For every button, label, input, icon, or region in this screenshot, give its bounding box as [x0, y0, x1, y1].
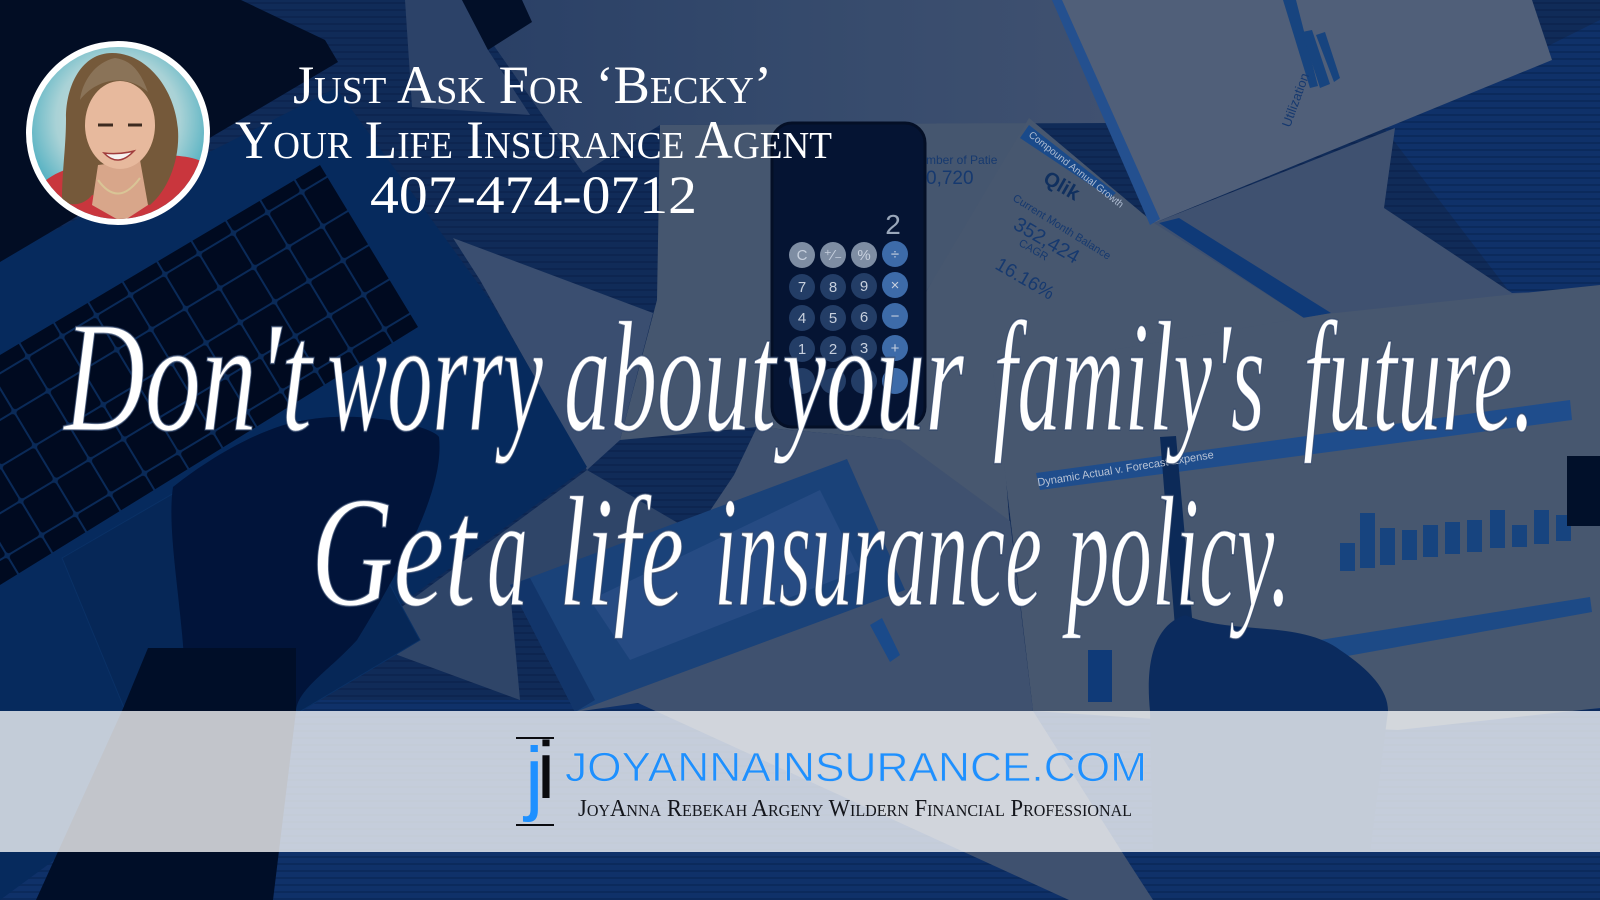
calculator buttons: 9 [860, 278, 868, 295]
footer logo and branding [516, 726, 1147, 826]
paper: below laptop edge [357, 470, 690, 700]
eyes [98, 124, 142, 126]
calculator buttons: % [857, 247, 871, 264]
line two: a [487, 465, 528, 640]
name and title: JoyAnna Rebekah Argeny Wildern Financial Professional [578, 796, 1132, 822]
desk below band [0, 700, 1600, 900]
footer band [0, 711, 1600, 852]
blue diagonal stripe [1159, 218, 1331, 318]
right hand [1149, 615, 1388, 852]
dashboard blue stripe [1036, 400, 1572, 490]
small report bars [870, 618, 900, 662]
stack side edge [1052, 0, 1160, 225]
hand on trackpad [171, 417, 440, 712]
laptop body [0, 88, 587, 900]
line: your life insurance agent: Your Life Insurance Agent [235, 110, 832, 170]
line one: your [773, 290, 964, 465]
label: growth rate: 16.16% [992, 254, 1058, 305]
line one: worry [327, 290, 543, 465]
calculator buttons: 7 [798, 279, 806, 296]
surface wedge at left [0, 127, 34, 217]
paper: top left sheet [405, 0, 530, 115]
line one: about [564, 290, 778, 465]
line two [311, 465, 1291, 640]
ji monogram logo [516, 726, 555, 826]
smile [104, 151, 134, 160]
pen [1160, 436, 1194, 640]
label: balance title: Current Month Balance [1010, 192, 1113, 262]
line two: Get [311, 465, 479, 640]
portrait figure [46, 53, 200, 219]
calculator buttons [789, 241, 908, 394]
paper: lower centre [575, 427, 1153, 900]
paper: insights sheet [1000, 128, 1600, 420]
black clip top centre [462, 0, 532, 50]
dashboard bar chart [1340, 510, 1571, 571]
calculator buttons: 4 [798, 310, 806, 327]
hair highlight [80, 58, 148, 100]
dashboard table stripe [1320, 597, 1592, 660]
paper: Qlik report [880, 118, 1330, 530]
paper: top centre sheet [490, 0, 1110, 173]
paper: under laptop [453, 238, 653, 470]
calculator buttons: 6 [860, 309, 868, 326]
money detail [590, 490, 860, 660]
stack bars [1283, 0, 1340, 88]
face [85, 81, 155, 169]
calculator buttons: 2 [829, 341, 837, 358]
label: CAGR: CAGR [1016, 237, 1050, 264]
calculator buttons: − [891, 308, 900, 325]
binder clip [1567, 456, 1600, 526]
label: patients number: 0,720 [926, 168, 974, 189]
ji monogram logo: j [522, 730, 543, 823]
label: dashboard title: Dynamic Actual v. Forecast Expense [1037, 449, 1215, 489]
label: stripe heading: Compound Annual Growth [1026, 130, 1125, 211]
line two: life [559, 465, 684, 640]
paper labels [926, 71, 1312, 489]
line one: family's [993, 290, 1265, 465]
line two: insurance [714, 465, 1042, 640]
calculator buttons: + [891, 340, 900, 357]
main script message [63, 290, 1535, 640]
calculator buttons: 1 [798, 341, 806, 358]
website address: JOYANNAINSURANCE.COM [565, 744, 1147, 790]
Qlik report stripe [1020, 125, 1116, 198]
money stack lines [510, 578, 595, 712]
hair [62, 53, 178, 205]
calculator buttons: 8 [829, 279, 837, 296]
calculator buttons: 5 [829, 310, 837, 327]
paper: bottom right dashboard [993, 285, 1600, 730]
agent contact heading [235, 55, 832, 225]
calculator buttons: ⁺⁄₋ [824, 247, 842, 264]
money [510, 459, 905, 712]
laptop screen [0, 0, 338, 262]
paper: top right stack [1052, 0, 1552, 223]
label: stack title: Utilization [1279, 71, 1312, 129]
white ring [26, 41, 210, 225]
jacket [46, 156, 200, 219]
paper: centre behind phone [620, 123, 1034, 440]
dashboard small bar [1088, 650, 1112, 702]
line one [63, 290, 1535, 465]
line two: policy. [1062, 465, 1291, 640]
line: just ask for Becky: Just Ask For ‘Becky’ [293, 55, 772, 115]
necklace [98, 178, 140, 194]
line: phone number: 407-474-0712 [370, 165, 697, 225]
calculator buttons: C [797, 247, 808, 264]
calculator buttons: 3 [860, 340, 868, 357]
photo backdrop [32, 47, 204, 219]
calculator display digit: 2 [885, 209, 901, 240]
trackpad [62, 420, 420, 795]
calculator buttons: × [891, 277, 899, 294]
label: patients heading: mber of Patie [926, 153, 998, 167]
dark wood at right [1384, 20, 1600, 295]
portrait badge [26, 41, 210, 230]
keyboard [0, 165, 418, 585]
sleeve [36, 648, 296, 900]
calculator buttons: ÷ [891, 246, 899, 263]
label: Qlik: Qlik [1040, 167, 1084, 206]
neck and chest [92, 160, 148, 222]
label: balance: 352,424 [1010, 213, 1083, 268]
line one: Don't [63, 290, 315, 465]
phone body [772, 123, 925, 427]
ji monogram logo: i [537, 726, 555, 816]
phone calculator [772, 123, 925, 427]
